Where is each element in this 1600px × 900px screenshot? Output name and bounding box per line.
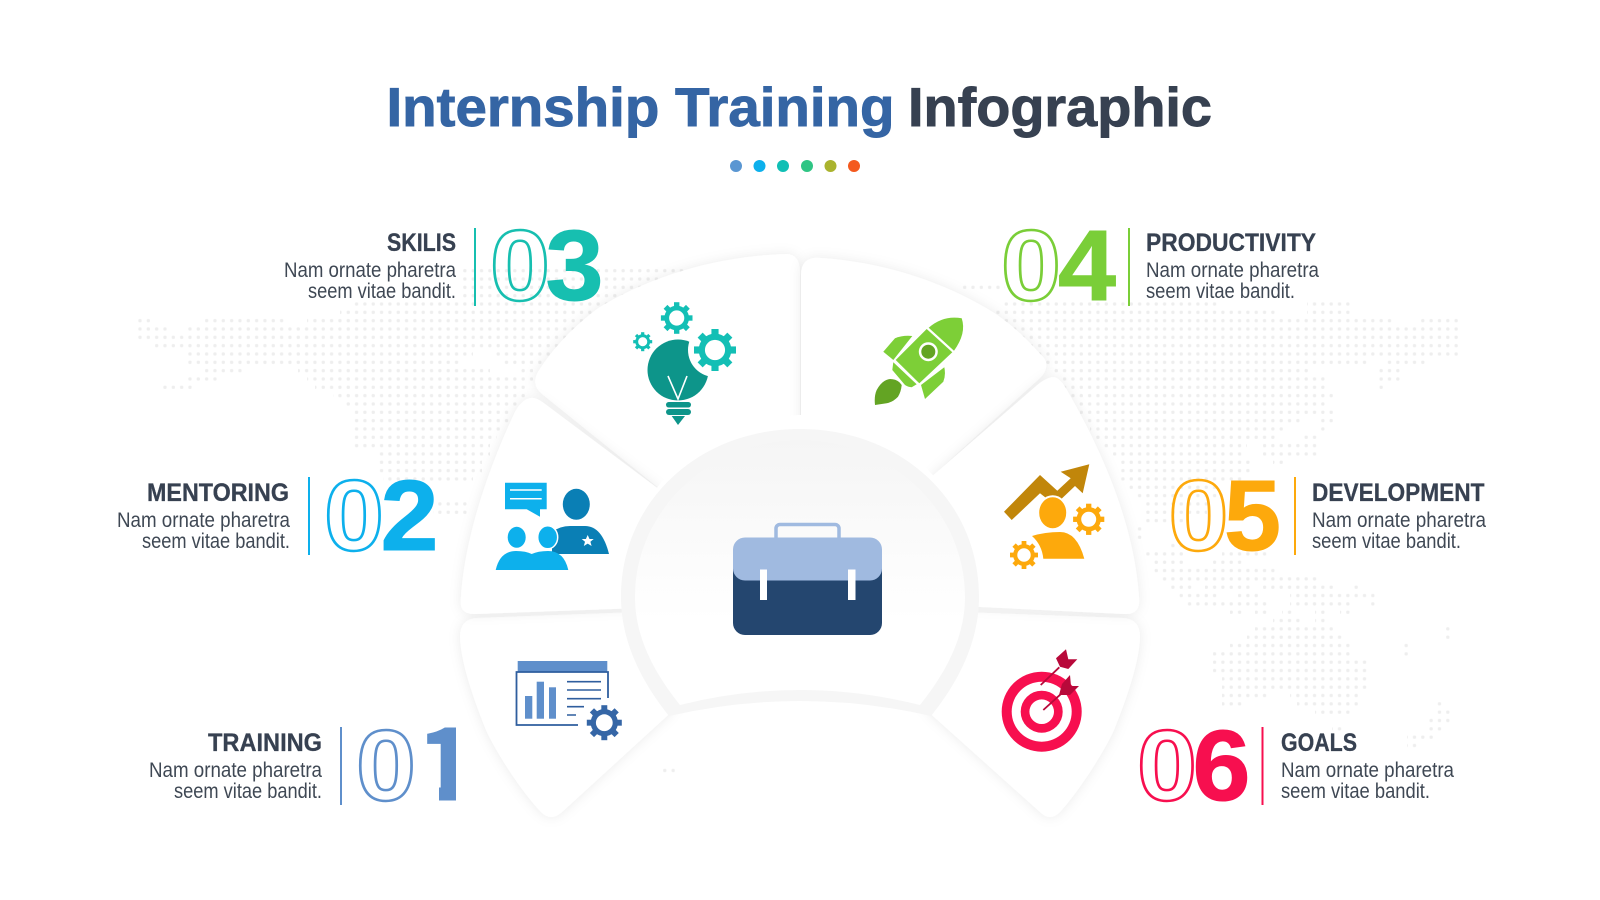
item 02: mentoring: 2 [380,460,438,572]
icon: light bulb with gears [633,302,742,425]
item 02: mentoring: seem vitae bandit. [142,530,290,553]
item 04: productivity: 4 [1058,210,1116,322]
title: Internship Training [386,76,894,138]
item 02: mentoring: MENTORING [147,479,289,507]
icon: chart dashboard with gear [516,661,622,740]
item 05: development: DEVELOPMENT [1312,479,1484,507]
item 01: training: seem vitae bandit. [174,780,322,803]
item 04: productivity [1001,210,1319,322]
decorative colour dots under title [730,160,860,172]
item 03: skills: Nam ornate pharetra [284,259,456,282]
item 04: productivity: seem vitae bandit. [1146,280,1295,303]
item 01: training: 0 [356,710,416,822]
item 03: skills: SKILIS [387,229,456,257]
panel: goals segment [920,612,1140,817]
icon: mentor and team [496,483,609,570]
icon: target with darts [1002,649,1082,752]
item 02: mentoring: Nam ornate pharetra [117,509,290,532]
item 06: goals [1137,710,1454,822]
panel: skills segment [535,254,800,490]
item 03: skills: seem vitae bandit. [308,280,456,303]
item 06: goals: GOALS [1281,729,1357,757]
item 04: productivity: Nam ornate pharetra [1146,259,1319,282]
title [386,76,1212,138]
item 05: development: seem vitae bandit. [1312,530,1461,553]
panel: mentoring segment [461,398,660,614]
item 04: productivity: PRODUCTIVITY [1146,229,1316,257]
item 05: development: Nam ornate pharetra [1312,509,1486,532]
item 06: goals: Nam ornate pharetra [1281,759,1454,782]
item 05: development [1168,460,1486,572]
item 03: skills: 0 [490,210,550,322]
item 01: training: TRAINING [208,729,322,757]
title: Infographic [908,76,1212,138]
icon: rocket [875,318,963,405]
item 01: training: Nam ornate pharetra [149,759,322,782]
item 06: goals: seem vitae bandit. [1281,780,1430,803]
item 04: productivity: 0 [1001,210,1061,322]
item 01: training [150,727,456,805]
item 01: training: 1 [417,684,476,829]
icon: briefcase [733,524,882,635]
item 03: skills [284,210,604,322]
panel: productivity segment [801,258,1046,490]
icon: growth person with gears [1004,464,1104,569]
panel: development segment [930,377,1139,614]
dotted world map background [138,271,1462,771]
item 03: skills: 3 [546,210,604,322]
item 05: development: 5 [1224,460,1281,572]
item 05: development: 0 [1168,460,1228,572]
item 02: mentoring: 0 [324,460,384,572]
panel: training segment [460,612,680,817]
item 06: goals: 6 [1192,710,1250,822]
item 06: goals: 0 [1137,710,1197,822]
panel: central hub [620,415,980,716]
item 02: mentoring [117,460,438,572]
